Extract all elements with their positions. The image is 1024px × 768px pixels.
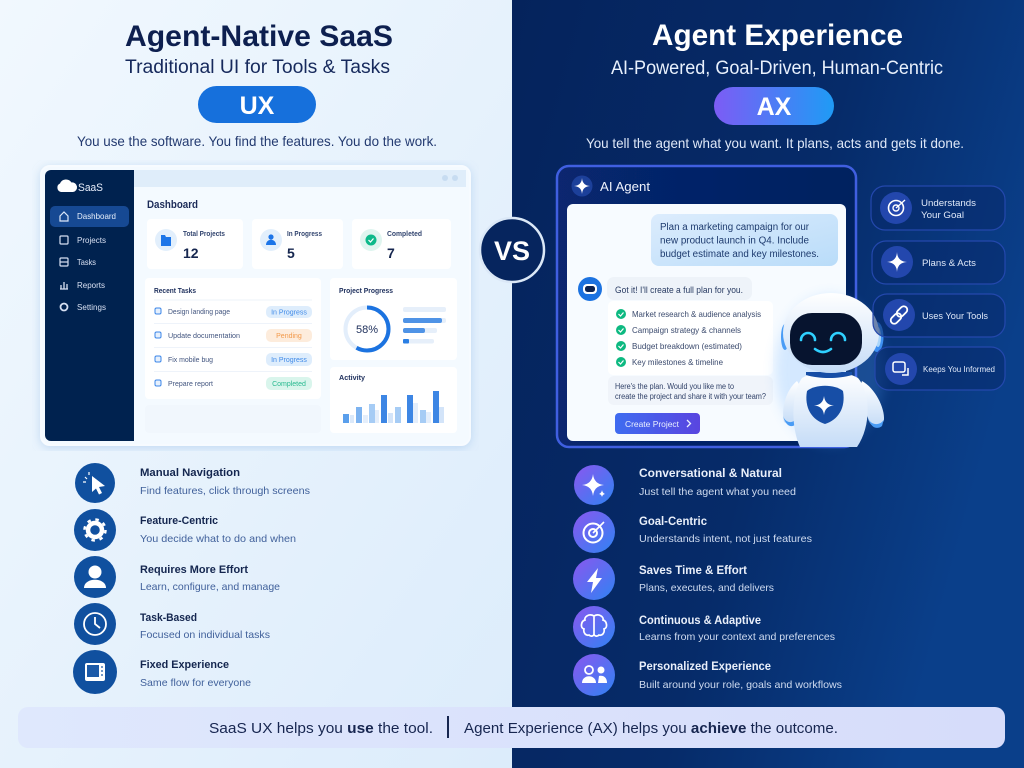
heading: Dashboard: Dashboard [147, 199, 198, 211]
robot right ear [870, 322, 884, 352]
nav item: Tasks: Tasks [77, 257, 96, 267]
feature: Fixed Experience [73, 650, 251, 694]
subtitle: traditional UI: Traditional UI for Tools & Tasks [125, 57, 390, 78]
badge: UX [198, 86, 316, 123]
subtitle: AI-powered: AI-Powered, Goal-Driven, Human-Centric [611, 58, 943, 79]
check item: budget breakdown: Budget breakdown (estimated) [632, 341, 742, 351]
donut chart: 58%: 58% [356, 324, 378, 336]
right header [586, 19, 964, 151]
feature: Manual Navigation: Manual Navigation [140, 467, 240, 479]
title: Agent Experience: Agent Experience [652, 19, 903, 52]
stat card: Completed: 7 [387, 245, 395, 261]
feature: Saves Time & Effort: Plans, executes, and delivers [639, 582, 774, 594]
nav item: Dashboard: Dashboard [77, 211, 116, 221]
feature: Goal-Centric [573, 511, 812, 553]
plan checklist [608, 301, 773, 375]
SaaS logo: SaaS [78, 182, 103, 194]
user message bubble [651, 214, 838, 266]
robot chest badge [806, 386, 844, 424]
stat card: In Progress: 5 [287, 245, 295, 261]
nav item: Settings [60, 302, 106, 312]
feature: Continuous & Adaptive [573, 606, 835, 648]
agent reply bubble [607, 277, 752, 300]
feature: Requires More Effort: Learn, configure, and manage [140, 581, 280, 593]
pill: Understands Your Goal [871, 186, 1005, 230]
features list: UX [73, 463, 310, 694]
user message bubble: budget estimate and key milestones. [660, 249, 819, 260]
tagline: agent gets it done: You tell the agent what you want. It plans, acts and gets it done. [586, 135, 964, 151]
pill: Understands Your Goal: Your Goal [921, 210, 964, 221]
panel: Project Progress [330, 278, 457, 360]
task row: Fix mobile bug: Fix mobile bug [168, 355, 213, 364]
SaaS logo [57, 179, 103, 194]
feature: Goal-Centric: Understands intent, not just features [639, 533, 812, 545]
pill: Keeps You Informed: Keeps You Informed [923, 364, 995, 374]
feature: Saves Time & Effort [573, 558, 774, 600]
check item: key milestones: Key milestones & timeline [632, 357, 723, 367]
button: Create Project: Create Project [625, 419, 680, 429]
panel: Activity bar chart [330, 367, 457, 433]
pill: Uses Your Tools: Uses Your Tools [922, 311, 988, 322]
robot body [793, 372, 868, 447]
task row: Prepare report: Prepare report [168, 379, 214, 388]
task row: Fix mobile bug: In Progress [271, 357, 307, 364]
feature: Conversational & Natural: Just tell the agent what you need [639, 486, 796, 498]
VS badge: VS [494, 236, 530, 266]
stat card: Completed: Completed [387, 229, 422, 238]
agent follow-up question: create the project and share it with your team? [615, 392, 767, 401]
stat card: In Progress: In Progress [287, 229, 322, 238]
stat card: Total Projects: Total Projects [183, 229, 225, 238]
tagline: you do the work: You use the software. You find the features. You do the work. [77, 133, 437, 149]
panel: Recent Tasks [145, 278, 321, 399]
stat card: Total Projects: 12 [183, 245, 199, 261]
agent follow-up question [608, 376, 773, 405]
task row: Design landing page [155, 306, 312, 318]
feature: Requires More Effort: Requires More Effort [140, 564, 248, 576]
feature: Personalized Experience: Personalized Experience [639, 661, 771, 673]
right background panel [512, 0, 1024, 768]
feature: Goal-Centric: Goal-Centric [639, 516, 708, 528]
icon: bot avatar [578, 277, 602, 301]
summary: Agent Experience: Agent Experience (AX) helps you achieve the outcome. [464, 720, 838, 737]
robot left ear [781, 324, 789, 350]
task row: Prepare report: Completed [272, 381, 306, 388]
bottom summary bar [18, 707, 1005, 748]
feature: Feature-Centric [74, 509, 296, 551]
feature: Feature-Centric: You decide what to do and when [140, 533, 296, 545]
check item: market research: Market research & audience analysis [632, 309, 761, 319]
nav item: Projects: Projects [77, 235, 106, 245]
button: Create Project [615, 413, 700, 434]
sidebar navigation [45, 170, 134, 441]
agent header [572, 176, 650, 196]
left header [77, 20, 437, 149]
agent reply bubble: Got it! I'll create a full plan for you. [615, 285, 743, 295]
task row: Design landing page: In Progress [271, 310, 307, 316]
robot neck band [806, 372, 852, 378]
nav item: Settings: Settings [77, 302, 106, 312]
icon: robot mascot [775, 293, 885, 447]
pill: Keeps You Informed [875, 347, 1005, 390]
feature: Manual Navigation: Find features, click through screens [140, 485, 310, 497]
panel: Activity bar chart: Activity [339, 373, 366, 382]
feature: Task-Based [74, 603, 270, 645]
agent header: AI Agent [600, 179, 650, 194]
feature: Continuous & Adaptive: Learns from your context and preferences [639, 631, 835, 643]
robot arms [783, 381, 884, 428]
features list: AX [573, 465, 842, 696]
nav item: Reports: Reports [77, 280, 105, 290]
pill: Understands Your Goal: Understands [921, 198, 976, 209]
feature: Personalized Experience: Built around your role, goals and workflows [639, 679, 842, 691]
capability pills [871, 186, 1005, 390]
panel: Project Progress: Project Progress [339, 286, 393, 295]
summary: SaaS UX: SaaS UX helps you use the tool. [209, 720, 433, 737]
pill: Uses Your Tools [873, 294, 1005, 337]
task row: Design landing page: Design landing page [168, 307, 230, 316]
panel: AI Agent chat mockup [557, 166, 856, 447]
panel: SaaS dashboard mockup [41, 166, 470, 445]
user message bubble: new product launch in Q4. Include [660, 236, 809, 246]
feature: Requires More Effort [74, 556, 280, 598]
badge: AX: AX [757, 93, 792, 121]
robot head [783, 293, 879, 373]
feature: Task-Based: Task-Based [140, 612, 197, 624]
check item: campaign strategy: Campaign strategy & channels [632, 325, 741, 335]
panel: Recent Tasks: Recent Tasks [154, 286, 196, 295]
stat card: Total Projects [147, 219, 243, 269]
stat card: In Progress [252, 219, 343, 269]
badge: UX: UX [240, 92, 275, 120]
nav item: Dashboard [50, 206, 129, 227]
task row: Prepare report [155, 377, 312, 390]
title: Agent-Native SaaS: Agent-Native SaaS [125, 20, 393, 53]
task row: Update documentation: Update documentation [168, 331, 240, 340]
feature: Feature-Centric: Feature-Centric [140, 515, 218, 527]
nav item: Tasks [60, 257, 96, 267]
nav item: Reports [60, 280, 105, 290]
nav item: Projects [60, 235, 106, 245]
feature: Continuous & Adaptive: Continuous & Adaptive [639, 615, 761, 627]
feature: Fixed Experience: Fixed Experience [140, 659, 229, 671]
feature: Personalized Experience [573, 654, 842, 696]
left background panel [0, 0, 512, 768]
task row: Update documentation [155, 329, 312, 342]
robot visor face [790, 313, 862, 365]
feature: Saves Time & Effort: Saves Time & Effort [639, 565, 747, 577]
mini progress bars [403, 307, 446, 344]
agent follow-up question: Here's the plan. Would you like me to [615, 382, 734, 391]
feature: Task-Based: Focused on individual tasks [140, 629, 270, 641]
pill: Plans & Acts [872, 241, 1005, 284]
feature: Conversational & Natural: Conversational & Natural [639, 468, 782, 480]
task row: Fix mobile bug [155, 353, 312, 366]
pill: Plans & Acts: Plans & Acts [922, 258, 976, 269]
feature: Fixed Experience: Same flow for everyone [140, 677, 251, 689]
user message bubble: Plan a marketing campaign for our [660, 222, 810, 233]
feature: Conversational & Natural [574, 465, 796, 505]
stat card: Completed [352, 219, 451, 269]
feature: Manual Navigation [75, 463, 310, 503]
VS badge [480, 218, 544, 282]
badge: AX [714, 87, 834, 125]
task row: Update documentation: Pending [276, 333, 302, 340]
